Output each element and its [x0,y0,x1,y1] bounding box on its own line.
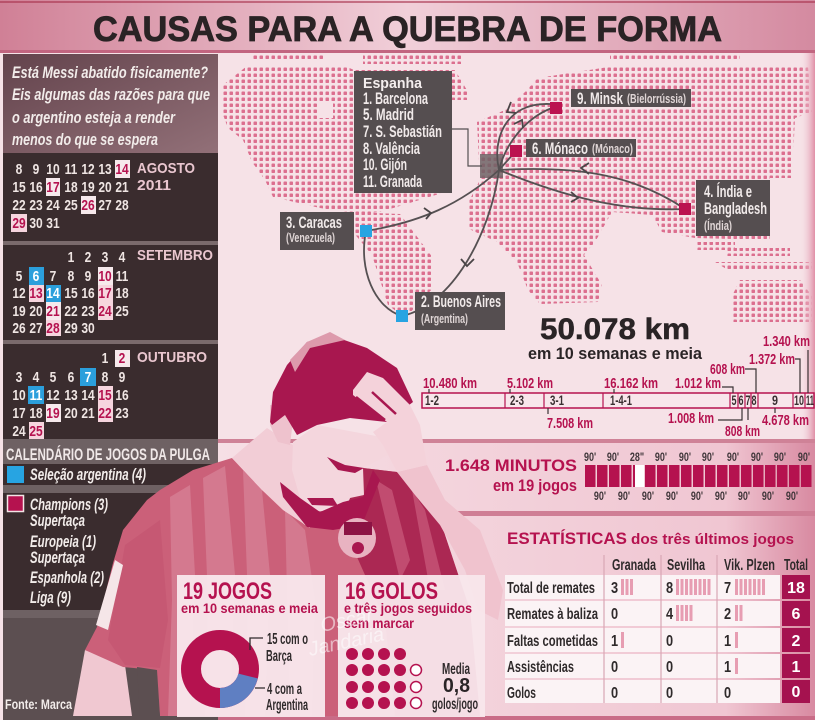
forearm [397,465,503,620]
panel: August calendar: AGOSTO [137,160,195,177]
kilometre labels: 808 km [725,423,760,440]
kilometre labels: 16.162 km [604,375,658,392]
panel: October calendar: 11 [30,387,43,403]
minutes bar chart: 90' [679,451,691,464]
row labels: Golos [507,685,536,702]
label: India: (Índia) [704,218,732,233]
statistics table: Granada [612,557,656,574]
distance bar chart: 6 [738,392,744,408]
crest [338,518,376,558]
row labels: Remates à baliza [507,606,598,623]
sleeve shade [108,520,168,668]
row labels: Total de remates [507,580,595,597]
sleeve patch [96,560,123,630]
panel: September calendar: 3 [102,249,109,265]
divider [3,340,218,344]
panel: September calendar: 28 [46,320,60,336]
panel: calendar legend: Europeia (1) [30,532,96,551]
panel: September calendar: 11 [116,268,129,284]
row values: 8 [666,580,673,597]
panel: September calendar: 15 [64,285,78,301]
panel: August calendar: 11 [65,161,78,177]
minutes bar chart: 28" [630,451,644,464]
distance heading [528,313,703,363]
panel: August calendar: 24 [46,197,60,213]
title: CAUSAS PARA A QUEBRA DE FORMA [93,10,722,49]
row labels [507,580,598,702]
label: Espanha [354,71,452,193]
panel: 19 jogos: 15 com o [267,631,308,648]
route arcs [364,104,685,316]
route arrowheads [424,102,589,266]
minutes bar chart: 90' [594,490,606,503]
row values: 2 [724,606,731,623]
minutes bar chart [584,451,812,503]
statistics table: 2 [792,633,801,650]
minutes bar chart: 90' [727,451,739,464]
row labels: Faltas cometidas [507,633,598,650]
panel: October calendar: OUTUBRO [137,349,207,366]
panel: August calendar: 31 [46,215,60,231]
panel: August calendar [11,160,195,232]
label: Minsk: 9. Minsk [577,89,623,108]
panel: 16 golos: e três jogos seguidos [344,600,472,616]
row values: 0 [611,685,618,702]
panel: October calendar: 1 [102,350,109,366]
row tick bars [621,579,765,674]
panel: September calendar: 1 [68,249,75,265]
panel: October calendar: 2 [119,350,126,366]
markers [360,225,372,237]
panel: August calendar: 9 [33,161,40,177]
label: India: Bangladesh [704,199,767,218]
panel: calendar legend: Supertaça [30,511,85,530]
panel: calendar legend: Supertaça [30,548,85,567]
panel: October calendar: 13 [64,387,78,403]
distance bar chart: 10 [794,392,804,408]
statistics table [505,555,810,703]
minutes bar chart: 90' [642,490,654,503]
distance heading: em 10 semanas e meia [528,344,703,363]
panel: 19 jogos: 19 JOGOS [183,578,272,605]
distance bar chart: 2-3 [510,392,524,408]
left arm skin [73,650,132,716]
panel: calendar legend: Espanhola (2) [30,568,104,587]
row labels: Assistências [507,659,574,676]
label: Minsk [571,89,691,108]
label: Caracas [280,212,354,250]
kilometre labels: 1.012 km [675,375,721,392]
panel: September calendar: 21 [46,303,60,319]
panel: October calendar: 6 [68,369,75,385]
continents [222,54,812,322]
panel: October calendar: 23 [115,405,129,421]
panel: 19 jogos: 4 com a [267,681,302,698]
label: Minsk: (Bielorrússia) [627,91,686,106]
label: Espanha: Espanha [363,75,423,92]
panel: October calendar [12,349,207,439]
panel: October calendar: 15 [98,387,112,403]
panel: calendar legend: Liga (9) [30,588,71,607]
title banner [0,0,815,53]
distance heading: 50.078 km [540,313,690,346]
panel: September calendar: 16 [81,285,95,301]
kilometre labels: 608 km [710,361,745,378]
panel: September calendar: 14 [46,285,60,301]
minutes bar chart: 90' [584,451,596,464]
panel: October calendar: 21 [81,405,95,421]
distance bar chart: 7 [746,392,751,408]
panel: September calendar: 9 [85,268,92,284]
row values: 1 [724,633,731,650]
panel: 16 golos: 0,8 [443,675,470,697]
signature watermark: Oscar [318,604,377,637]
statistics table: 0 [792,684,801,701]
panel: October calendar: 17 [12,405,26,421]
label: Espanha: 11. Granada [363,172,422,191]
row values: 0 [724,685,731,702]
panel: August calendar: 22 [12,197,26,213]
row values: 0 [666,685,673,702]
panel: October calendar: 20 [64,405,78,421]
minutes heading: em 19 jogos [493,476,577,495]
statistics table: Sevilha [667,557,705,574]
label: Espanha: 1. Barcelona [363,89,428,108]
panel: September calendar: 13 [29,285,43,301]
neck [232,428,310,528]
distance bar chart: 5 [732,392,737,408]
row values: 0 [666,659,673,676]
panel: October calendar: 14 [81,387,95,403]
panel: August calendar: 23 [29,197,43,213]
chest shade [345,468,480,716]
panel: October calendar: 9 [119,369,126,385]
panel: calendar legend: CALENDÁRIO DE JOGOS DA PULGA [6,445,210,464]
statistics table: 18 [787,580,805,597]
panel: 16 golos: sem marcar [344,615,414,631]
panel: 16 golos [338,575,485,717]
panel: 16 golos: golos/jogo [432,696,478,713]
panel: September calendar: 26 [12,320,26,336]
minutes bar chart: 90' [607,451,619,464]
panel: October calendar: 4 [33,369,40,385]
panel: calendar legend: Seleção argentina (4) [30,465,146,484]
panel: October calendar: 19 [46,405,60,421]
panel: August calendar: 30 [29,215,43,231]
statistics table: Vik. Plzen [724,557,775,574]
panel: September calendar: 20 [29,303,43,319]
panel: September calendar: 29 [64,320,78,336]
panel: August calendar: 28 [115,197,129,213]
panel: August calendar: 8 [16,161,23,177]
panel: September calendar: 8 [68,268,75,284]
minutes bar chart: 90' [774,451,786,464]
panel: September calendar: 25 [115,303,129,319]
world map [222,54,812,330]
minutes bar chart: 90' [655,451,667,464]
label: Espanha: 10. Gijón [363,155,407,174]
panel: October calendar: 16 [115,387,129,403]
total boxes [782,575,810,703]
distance bar chart: 1-4-1 [610,392,632,408]
panel: August calendar: 13 [98,161,112,177]
eye [327,457,364,473]
panel: October calendar: 10 [12,387,26,403]
under-arm gap [137,667,160,716]
goal dots [346,648,422,709]
label: Caracas: (Venezuela) [286,230,335,245]
panel: October calendar: 3 [16,369,23,385]
panel: August calendar: 2011 [137,177,171,194]
shirt [85,458,480,716]
minutes bar chart: 90' [618,490,630,503]
band dividers [218,439,815,443]
minutes bar chart: 90' [666,490,678,503]
row values: 1 [724,659,731,676]
signature watermark [305,604,386,661]
panel: September calendar: 5 [16,268,23,284]
minutes bar chart: 90' [798,451,810,464]
panel: 19 jogos: Barça [266,648,292,665]
kilometre labels: 1.372 km [749,351,795,368]
panel: September calendar: 19 [12,303,26,319]
label: Espanha: 5. Madrid [363,105,414,124]
panel: August calendar: 20 [98,179,112,195]
hair [270,335,413,435]
row values: 7 [724,580,731,597]
panel: September calendar: 4 [119,249,126,265]
panel: September calendar: 2 [85,249,92,265]
statistics heading: dos três últimos jogos [631,531,794,548]
panel: October calendar: 24 [12,423,26,439]
panel: left dark background [3,153,218,613]
statistics table: 6 [792,606,801,623]
spain highlight [480,154,503,178]
hand [353,372,427,472]
panel: 19 jogos [177,575,325,717]
minutes bar chart: 90' [702,451,714,464]
distance bar chart [422,333,814,440]
panel: August calendar: 25 [64,197,78,213]
label: India: 4. Índia e [704,182,752,201]
panel: October calendar: 7 [85,369,91,385]
panel: October calendar: 18 [29,405,43,421]
kilometre labels: 1.008 km [668,410,714,427]
panel: intro text: menos do que se espera [12,130,158,149]
label: Buenos Aires: 2. Buenos Aires [421,292,501,311]
distance bar chart: 8 [752,392,757,408]
distance bar chart: 3-1 [550,392,564,408]
panel: September calendar: 7 [50,268,56,284]
divider [3,241,218,245]
panel: calendar legend [3,439,218,720]
panel: August calendar: 21 [115,179,129,195]
right edge shading [800,53,815,439]
panel: August calendar: 14 [115,161,129,177]
source credit: Fonte: Marca [5,696,72,712]
panel: August calendar: 26 [81,197,95,213]
panel: September calendar: SETEMBRO [137,247,213,264]
label: Espanha: 8. Valência [363,139,420,158]
kilometre labels: 10.480 km [423,375,477,392]
panel: September calendar [12,247,213,336]
minutes bar chart: 90' [762,490,774,503]
panel: September calendar: 30 [81,320,95,336]
signature watermark: Jandaria [305,623,386,661]
panel: October calendar: 12 [46,387,60,403]
statistics heading: ESTATÍSTICAS [507,529,627,548]
beard [280,470,380,530]
panel: October calendar: 8 [102,369,109,385]
kilometre labels [423,333,810,440]
panel: intro text: o argentino esteja a render [12,108,176,127]
icon: magenta legend swatch [8,496,24,512]
panel: intro text: Eis algumas das razões para que [12,85,210,104]
row values: 0 [611,606,618,623]
row values: 4 [666,606,673,623]
panel: October calendar: 22 [98,405,112,421]
label: Buenos Aires [415,292,505,330]
panel: October calendar: 25 [29,423,43,439]
minutes bar chart: 90' [738,490,750,503]
panel: September calendar: 6 [33,268,40,284]
label: Espanha: 7. S. Sebastián [363,122,442,141]
panel: 19 jogos: Argentina [266,697,308,714]
distance bar chart: 1-2 [425,392,439,408]
icon: blue legend swatch [7,466,24,483]
panel: August calendar: 29 [12,215,26,231]
panel: September calendar: 22 [64,303,78,319]
panel: intro text [3,54,218,153]
distance bar chart: 9 [772,392,778,408]
panel: August calendar: 12 [81,161,95,177]
donut chart [191,640,258,708]
shirt stripes [168,466,315,716]
label: India [696,180,770,236]
label: Monaco: 6. Mónaco [532,139,588,158]
minutes heading: 1.648 MINUTOS [445,456,577,475]
minutes bar chart: 90' [715,490,727,503]
panel: September calendar: 24 [98,303,112,319]
label: Buenos Aires: (Argentina) [421,311,468,326]
panel: September calendar: 12 [12,285,26,301]
ear [270,405,293,445]
panel: August calendar: 17 [46,179,60,195]
panel: September calendar: 18 [115,285,129,301]
panel: October calendar: 5 [50,369,57,385]
row values: 0 [611,659,618,676]
panel: calendar legend: Champions (3) [30,495,108,514]
panel: August calendar: 15 [12,179,26,195]
minutes heading [445,456,577,495]
photo: Messi, drawn illustration [73,332,503,716]
panel: 19 jogos: em 10 semanas e meia [181,600,318,616]
label: Caracas: 3. Caracas [286,213,342,232]
label: Monaco: (Mónaco) [592,141,633,156]
minutes bar chart: 90' [691,490,703,503]
row values: 0 [666,633,673,650]
panel: 16 golos: Media [442,661,470,678]
panel: intro text: Está Messi abatido fisicamente? [12,63,208,82]
row values: 3 [611,580,618,597]
kilometre labels: 5.102 km [507,375,553,392]
panel: 16 golos: 16 GOLOS [345,578,438,605]
kilometre labels: 7.508 km [547,415,593,432]
statistics table: 1 [792,659,801,676]
face [292,425,388,512]
minutes bar chart: 90' [786,490,798,503]
minutes bar chart: 90' [751,451,763,464]
panel: August calendar: 16 [29,179,43,195]
panel: September calendar: 23 [81,303,95,319]
panel: September calendar: 10 [98,268,112,284]
statistics heading [507,529,794,548]
row values [611,580,731,702]
panel: August calendar: 10 [46,161,60,177]
panel: September calendar: 17 [98,285,112,301]
panel: September calendar: 27 [29,320,43,336]
panel: August calendar: 18 [64,179,78,195]
panel: August calendar: 27 [98,197,112,213]
row values: 1 [611,633,618,650]
panel: August calendar: 19 [81,179,95,195]
hair highlights [290,332,345,372]
